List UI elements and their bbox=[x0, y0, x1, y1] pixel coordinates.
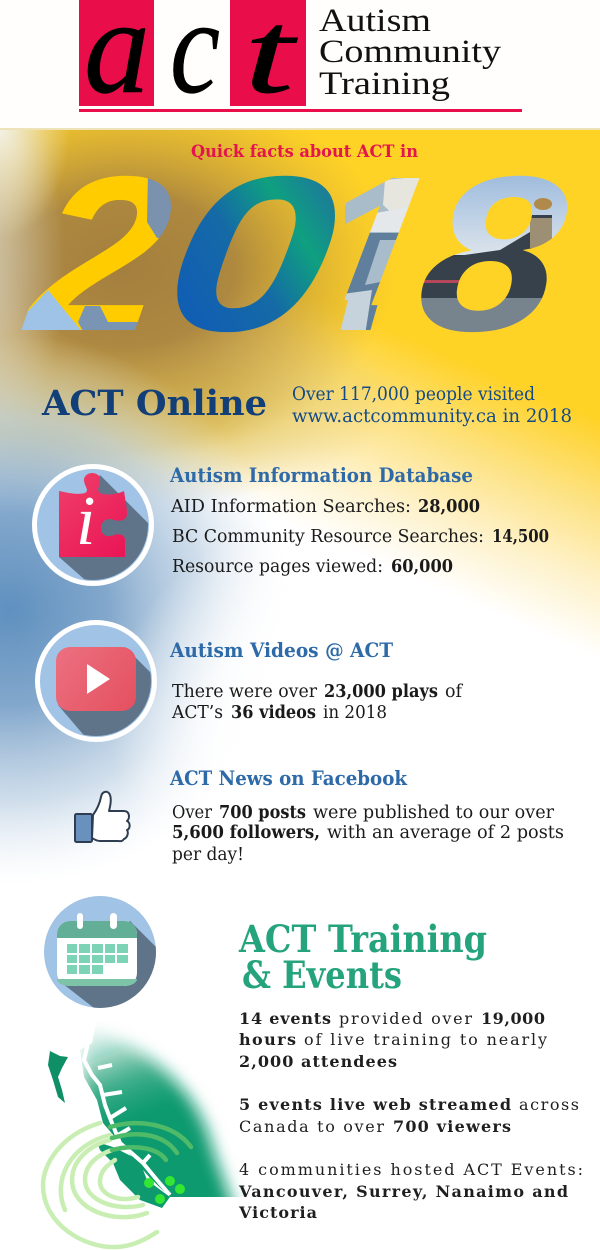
text: plays: in 2018 bbox=[323, 703, 387, 723]
text: plays: ACT’s bbox=[171, 703, 223, 723]
heading: ACT Online: ACT Online bbox=[41, 383, 267, 424]
text: events: provided over bbox=[339, 1009, 472, 1028]
map: British Columbia coast bbox=[43, 1030, 236, 1247]
text: website visitors bbox=[292, 384, 572, 427]
map: Vancouver Island bbox=[97, 1142, 170, 1208]
digit 8: Vancouver skyline bbox=[421, 176, 568, 332]
text: web streams: Canada to over bbox=[239, 1117, 384, 1136]
logo: act letters bbox=[84, 0, 299, 122]
panel: Autism Videos bbox=[169, 638, 464, 723]
text: events: 19,000 bbox=[481, 1009, 545, 1028]
text: plays: 23,000 plays bbox=[324, 682, 438, 702]
logo: Autism Community Training: Training bbox=[319, 66, 450, 102]
map: mainland green fan bbox=[80, 1030, 236, 1215]
text: posts: Over bbox=[172, 803, 213, 823]
icon: play button bbox=[35, 620, 157, 742]
text: communities bbox=[238, 1160, 583, 1222]
line: BC searches: BC Community Resource Searches: bbox=[172, 527, 484, 547]
heading: ACT News on Facebook bbox=[169, 766, 408, 790]
text: website visitors: Over 117,000 people visited bbox=[292, 384, 535, 405]
text: communities: Vancouver, Surrey, Nanaimo and bbox=[238, 1182, 568, 1201]
heading: Autism Information Database bbox=[169, 463, 473, 487]
text: posts: with an average of 2 posts bbox=[327, 823, 564, 843]
text: posts: 5,600 followers, bbox=[172, 823, 320, 843]
text: events: 14 events bbox=[239, 1009, 331, 1028]
text: web streams: 700 viewers bbox=[393, 1117, 511, 1136]
heading: Autism Videos @ ACT bbox=[169, 638, 393, 662]
map: signal arcs bbox=[43, 1123, 157, 1247]
text: plays: 36 videos bbox=[231, 703, 316, 723]
map: coastline inlets bbox=[84, 1043, 170, 1195]
panel: ACT News on Facebook bbox=[169, 766, 564, 865]
line: pages viewed: Resource pages viewed: bbox=[172, 557, 383, 577]
big year 2018 bbox=[21, 176, 568, 332]
map: Haida Gwaii bbox=[48, 1051, 68, 1103]
panel: ACT Training and Events bbox=[238, 917, 583, 1222]
text: web streams bbox=[239, 1095, 579, 1136]
text: website visitors: www.actcommunity.ca in 2018 bbox=[292, 406, 572, 427]
line: AID searches: AID Information Searches: bbox=[170, 497, 411, 517]
heading bbox=[238, 917, 487, 997]
heading: & Events bbox=[242, 953, 402, 997]
heading: Quick facts about ACT in: Quick facts about ACT in bbox=[191, 142, 418, 162]
map: arcs over land bbox=[110, 1123, 191, 1160]
text: posts: per day! bbox=[172, 845, 244, 865]
logo: Autism Community Training: Autism bbox=[319, 3, 431, 39]
panel: Autism Information Database bbox=[169, 463, 549, 577]
line: pages viewed: 60,000 bbox=[391, 557, 453, 577]
text: posts bbox=[172, 803, 564, 865]
text: plays: There were over bbox=[172, 682, 318, 702]
text: posts: 700 posts bbox=[219, 803, 306, 823]
digit 1: photos bbox=[340, 178, 420, 330]
line: AID searches: 28,000 bbox=[418, 497, 480, 517]
icon: puzzle piece info bbox=[32, 464, 154, 586]
text: communities: 4 communities hosted ACT Events: bbox=[239, 1160, 583, 1179]
map: event location dots bbox=[144, 1176, 185, 1204]
text: events bbox=[239, 1009, 547, 1071]
logo: Autism Community Training bbox=[319, 3, 502, 102]
text: web streams: across bbox=[519, 1095, 579, 1114]
logo: red squares bbox=[79, 0, 306, 106]
icon: calendar bbox=[44, 896, 156, 1008]
digit 2 bbox=[21, 176, 171, 330]
text: events: 2,000 attendees bbox=[239, 1052, 397, 1071]
logo: Autism Community Training: Community bbox=[319, 34, 502, 70]
text: posts: were published to our over bbox=[313, 803, 555, 823]
text: web streams: 5 events live web streamed bbox=[239, 1095, 511, 1114]
text: events: of live training to nearly bbox=[304, 1030, 547, 1049]
heading: ACT Training bbox=[238, 917, 487, 961]
text: plays: of bbox=[445, 682, 464, 702]
text: plays bbox=[171, 682, 464, 723]
header: logo bbox=[0, 0, 600, 130]
line: BC searches: 14,500 bbox=[492, 527, 549, 547]
digit 0 bbox=[177, 176, 335, 332]
text: events: hours bbox=[239, 1030, 296, 1049]
icon: puzzle piece info: i bbox=[76, 483, 95, 560]
text: communities: Victoria bbox=[238, 1203, 317, 1222]
icon: thumbs up bbox=[75, 792, 130, 842]
